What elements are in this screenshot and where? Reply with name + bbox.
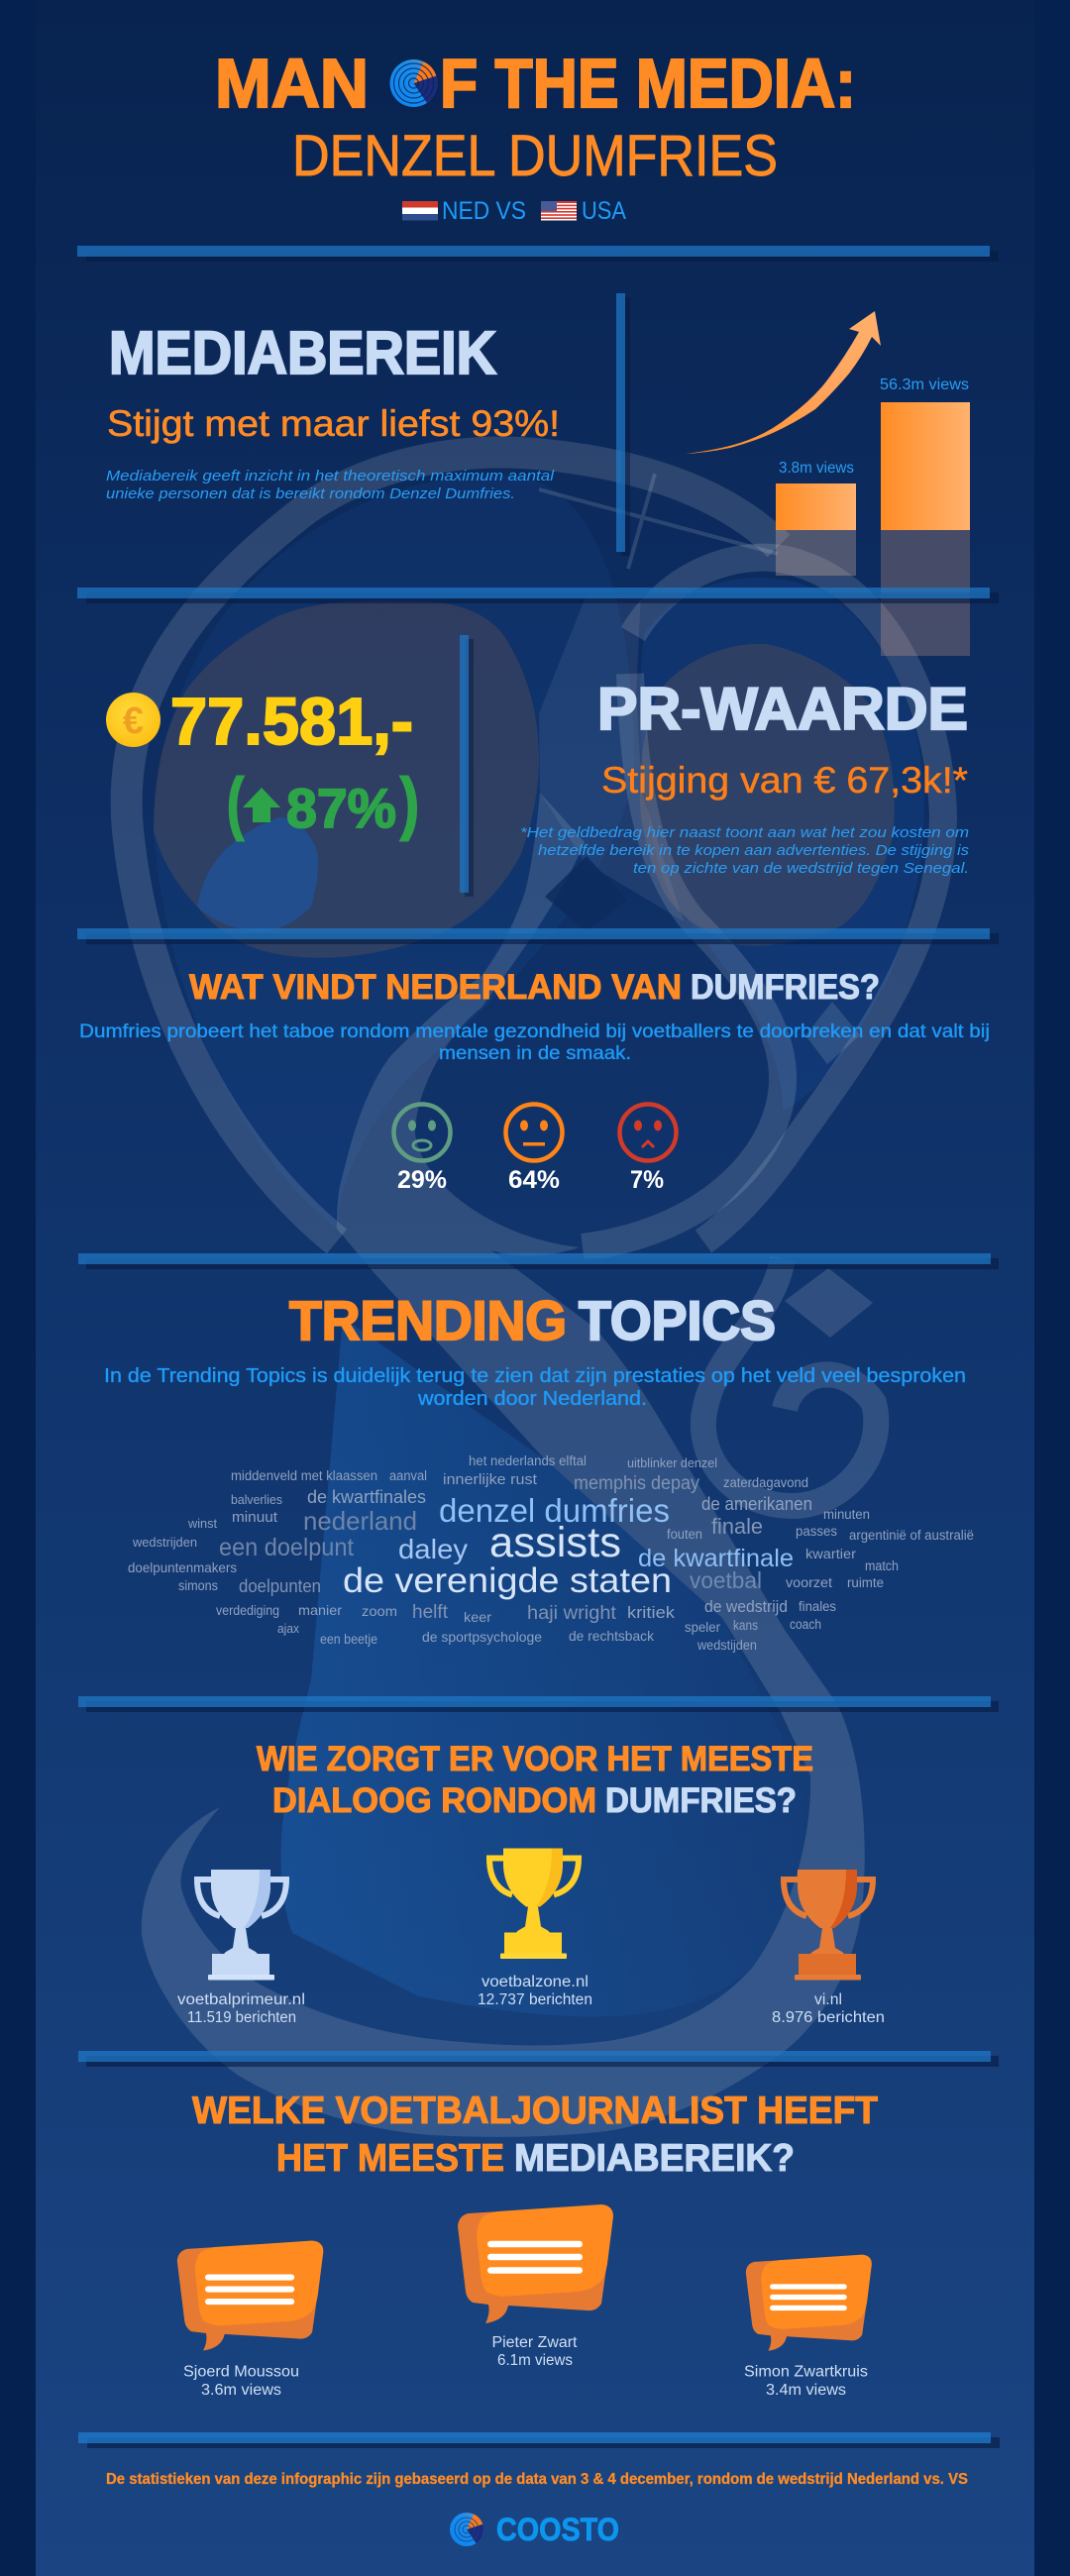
heading: trending topics — [289, 1289, 776, 1351]
word cloud: kwartier — [805, 1547, 857, 1561]
word cloud: finales — [799, 1599, 836, 1614]
word cloud: de kwartfinales — [307, 1487, 426, 1507]
divider 6 — [78, 2051, 999, 2067]
word cloud: match — [865, 1558, 899, 1573]
bar chart: views — [686, 311, 970, 656]
word cloud: denzel dumfries — [439, 1492, 670, 1529]
word cloud: middenveld met klaassen — [231, 1468, 377, 1483]
divider 4 — [78, 1253, 999, 1269]
word cloud: zoom — [362, 1603, 397, 1619]
word cloud: argentinië of australië — [849, 1528, 974, 1543]
divider 7 — [78, 2432, 1000, 2448]
arrow: growth — [686, 311, 881, 454]
label: 3.4m views — [766, 2382, 846, 2399]
icon: coosto logo as letter O — [390, 59, 438, 107]
journalist: Sjoerd Moussou — [177, 2241, 323, 2399]
value: 77.581,- — [170, 685, 413, 759]
word cloud: de wedstrijd — [704, 1598, 788, 1616]
label: voetbalprimeur.nl — [177, 1991, 305, 2026]
word cloud — [128, 1453, 974, 1653]
journalist: Simon Zwartkruis — [744, 2255, 872, 2399]
logo: coosto — [450, 2512, 619, 2547]
word cloud: doelpunten — [239, 1576, 321, 1596]
heading: wat vindt nederland: WAT VINDT NEDERLAND VAN — [189, 968, 682, 1007]
vertical divider 2 — [460, 635, 474, 897]
icon: happy face — [394, 1104, 450, 1161]
bar: 3.8m views: 3.8m views — [779, 460, 854, 477]
title: F THE MEDIA: — [440, 45, 856, 122]
icon: speech bubble — [458, 2204, 613, 2323]
word cloud: balverlies — [231, 1492, 282, 1507]
panel: pr-waarde — [520, 676, 969, 877]
heading: voetbaljournalist: HET MEESTE — [276, 2137, 504, 2180]
heading: voetbaljournalist — [192, 2090, 878, 2180]
footer note: De statistieken van deze infographic zijn gebaseerd op de data van 3 & 4 december, rondom de wedstrijd Nederland vs. VS — [106, 2471, 968, 2488]
word cloud: doelpuntenmakers — [128, 1559, 237, 1575]
word cloud: manier — [298, 1602, 342, 1618]
label: 3.6m views — [201, 2382, 281, 2399]
footnote: ten op zichte van de wedstrijd tegen Senegal. — [633, 861, 969, 877]
word cloud: ruimte — [847, 1575, 884, 1590]
word cloud: minuut — [232, 1509, 278, 1526]
negative share: 7% — [630, 1166, 664, 1194]
icon: coosto mark — [450, 2513, 483, 2546]
word cloud: het nederlands elftal — [469, 1453, 587, 1468]
label: voetbalzone.nl — [478, 1974, 592, 2008]
text: trending intro: In de Trending Topics is duidelijk terug te zien dat zijn prestaties op het veld veel besproken — [104, 1364, 966, 1387]
match line with flags: NED VS — [442, 197, 526, 225]
heading: mediabereik: MEDIABEREIK — [109, 319, 496, 386]
word cloud: minuten — [823, 1507, 870, 1522]
label: voetbalprimeur.nl: 11.519 berichten — [187, 2009, 296, 2026]
label: voetbalprimeur.nl: voetbalprimeur.nl — [177, 1991, 305, 2008]
subheading: stijging: Stijgt met maar liefst 93%! — [107, 403, 560, 444]
heading: trending topics: TRENDING — [289, 1289, 567, 1351]
footnote: hetzelfde bereik in te kopen aan advertenties. De stijging is — [538, 843, 969, 859]
word cloud: haji wright — [527, 1603, 617, 1624]
word cloud: nederland — [303, 1506, 417, 1536]
word cloud: helft — [412, 1602, 449, 1623]
icon: silver trophy — [197, 1870, 286, 1980]
growth percentage: ( — [227, 764, 245, 841]
word cloud: speler — [685, 1620, 720, 1635]
word cloud: een beetje — [320, 1632, 377, 1647]
bar: 3.8m views — [776, 460, 856, 576]
watermark: swirl logo — [127, 453, 943, 2137]
footnote — [520, 825, 969, 877]
word cloud: de sportpsychologe — [422, 1629, 542, 1645]
icon: USA flag — [541, 201, 577, 220]
word cloud: ajax — [277, 1621, 299, 1636]
heading: voetbaljournalist: WELKE VOETBALJOURNALIST HEEFT — [192, 2090, 878, 2132]
journalist: Pieter Zwart — [458, 2204, 613, 2369]
icon: speech bubble — [746, 2255, 872, 2351]
label: Simon Zwartkruis — [744, 2364, 868, 2380]
trophy: first place — [478, 1849, 592, 2008]
word cloud: winst — [187, 1516, 217, 1531]
panel: pr amount — [106, 685, 419, 841]
bar: 56.3m views — [880, 376, 970, 656]
divider 3 — [77, 928, 999, 944]
word cloud: wedstijden — [696, 1638, 757, 1653]
word cloud: passes — [796, 1523, 837, 1539]
text: mentale gezondheid — [79, 1020, 990, 1064]
heading: meeste dialoog: WIE ZORGT ER VOOR HET MEESTE — [257, 1740, 813, 1778]
description — [106, 469, 555, 502]
icon: Dutch flag — [402, 201, 438, 220]
label: Sjoerd Moussou — [183, 2364, 299, 2380]
growth percentage — [227, 764, 419, 841]
label — [491, 2334, 578, 2369]
trophy: third place — [772, 1870, 885, 2026]
label: Pieter Zwart — [491, 2334, 578, 2351]
label: 6.1m views — [497, 2352, 573, 2369]
match line with flags: USA — [582, 197, 626, 225]
logo: coosto: COOSTO — [496, 2512, 619, 2547]
word cloud: verdediging — [216, 1603, 279, 1618]
divider 1 — [77, 246, 999, 262]
divider 2 — [77, 588, 999, 603]
word cloud: simons — [178, 1578, 218, 1593]
title — [215, 45, 856, 122]
text: trending intro — [104, 1364, 966, 1410]
heading: pr-waarde: PR-WAARDE — [597, 676, 968, 742]
label — [744, 2364, 868, 2399]
word cloud: voorzet — [786, 1574, 832, 1590]
heading: meeste dialoog: DUMFRIES? — [605, 1781, 797, 1820]
heading: trending topics: TOPICS — [579, 1289, 776, 1351]
description: Mediabereik geeft inzicht in het theoretisch maximum aantal — [106, 469, 555, 484]
icon: euro coin: € — [123, 700, 144, 742]
match line with flags — [402, 197, 626, 225]
positive share: 29% — [397, 1166, 447, 1194]
text: mentale gezondheid: Dumfries probeert het taboe rondom mentale gezondheid bij voetballers te doorbreken en dat valt bij — [79, 1020, 990, 1042]
footnote: *Het geldbedrag hier naast toont aan wat het zou kosten om — [520, 825, 969, 841]
icon: speech bubble — [177, 2241, 323, 2351]
icon: euro coin — [106, 693, 160, 747]
word cloud: assists — [489, 1519, 621, 1566]
title: MAN — [215, 45, 369, 122]
label: vi.nl — [772, 1991, 885, 2026]
word cloud: voetbal — [690, 1567, 762, 1593]
icon: gold trophy — [489, 1849, 579, 1959]
word cloud: fouten — [667, 1527, 702, 1542]
subtitle: DENZEL DUMFRIES — [292, 124, 778, 188]
text: mentale gezondheid: mensen in de smaak. — [439, 1042, 631, 1064]
bar: 56.3m views: 56.3m views — [880, 376, 969, 393]
label: vi.nl: 8.976 berichten — [772, 2009, 885, 2026]
word cloud: finale — [711, 1514, 763, 1539]
label: vi.nl: vi.nl — [814, 1991, 842, 2008]
word cloud: de rechtsback — [569, 1628, 655, 1644]
heading: meeste dialoog — [257, 1740, 813, 1820]
word cloud: de amerikanen — [701, 1494, 812, 1514]
word cloud: kritiek — [627, 1603, 676, 1622]
neutral share: 64% — [508, 1166, 560, 1194]
icon: bronze trophy — [784, 1870, 873, 1980]
word cloud: kans — [733, 1618, 758, 1633]
word cloud: innerlijke rust — [443, 1471, 538, 1488]
label: voetbalzone.nl: voetbalzone.nl — [482, 1974, 588, 1990]
subheading: stijging: Stijging van € 67,3k!* — [601, 760, 968, 801]
word cloud: een doelpunt — [219, 1534, 354, 1561]
growth percentage: ) — [400, 764, 419, 841]
trophy: second place — [177, 1870, 305, 2026]
heading: meeste dialoog: DIALOOG RONDOM — [272, 1781, 596, 1820]
description: unieke personen dat is bereikt rondom Denzel Dumfries. — [106, 486, 515, 502]
word cloud: zaterdagavond — [723, 1475, 808, 1490]
word cloud: daley — [398, 1534, 468, 1564]
word cloud: aanval — [389, 1468, 427, 1483]
heading: voetbaljournalist: MEDIABEREIK? — [514, 2137, 795, 2180]
word cloud: keer — [464, 1609, 491, 1625]
word cloud: wedstrijden — [132, 1535, 197, 1550]
label — [183, 2364, 299, 2399]
icon: sad face — [620, 1104, 676, 1161]
text: trending intro: worden door Nederland. — [417, 1387, 647, 1410]
divider 5 — [78, 1696, 999, 1712]
word cloud: de verenigde staten — [343, 1561, 672, 1600]
vertical divider 1 — [616, 293, 630, 556]
growth percentage: 87% — [286, 777, 396, 839]
word cloud: coach — [790, 1617, 821, 1632]
heading: wat vindt nederland: DUMFRIES? — [691, 968, 880, 1007]
word cloud: uitblinker denzel — [627, 1456, 717, 1470]
panel: mediabereik — [106, 319, 560, 502]
word cloud: memphis depay — [574, 1473, 699, 1494]
label: voetbalzone.nl: 12.737 berichten — [478, 1991, 592, 2008]
icon: neutral face — [505, 1104, 563, 1161]
sentiment — [394, 1104, 676, 1194]
word cloud: de kwartfinale — [638, 1545, 794, 1572]
